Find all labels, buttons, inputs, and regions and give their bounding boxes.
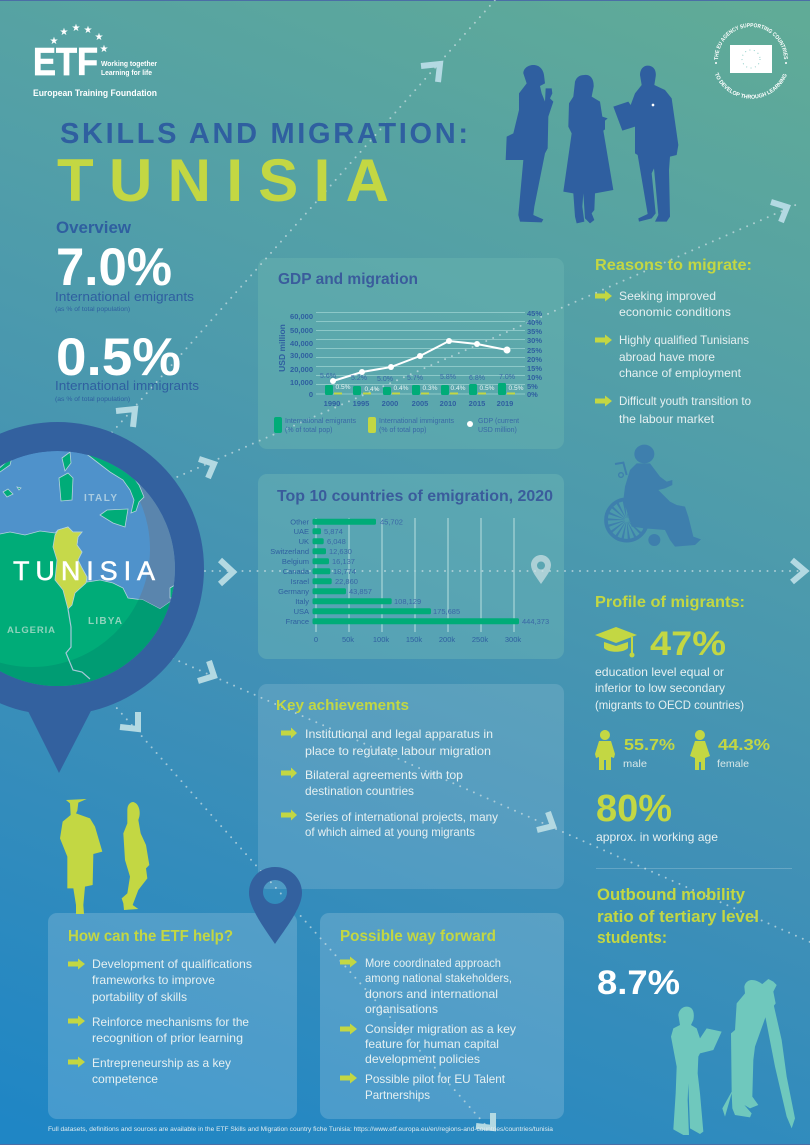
GDP and migration chart: 5.7%	[407, 375, 423, 382]
title: TUNISIA	[57, 147, 389, 214]
Top 10 countries chart: 200k	[439, 635, 455, 644]
Top 10 countries chart: Canada	[283, 567, 310, 576]
logo: ETF: ★	[50, 36, 59, 47]
stat: emigrants: International emigrants	[55, 289, 195, 304]
stat: male: male	[623, 758, 647, 770]
stat: immigrants	[55, 328, 200, 403]
Top 10 countries chart: Germany	[278, 587, 309, 596]
Top 10 countries chart: 12,630	[329, 547, 352, 556]
Top 10 countries chart: 45,702	[380, 518, 403, 526]
panel: way forward background	[320, 913, 564, 1119]
Top 10 countries chart: 444,373	[522, 617, 549, 626]
item 3: Possible pilot for EU Talent	[365, 1072, 506, 1086]
logo: ETF: ★	[72, 23, 81, 34]
reason 2: chance of employment	[619, 366, 742, 380]
Top 10 countries chart: Belgium	[282, 557, 309, 566]
footer source note: Full datasets, definitions and sources are available in the ETF Skills and Migration country fiche Tunisia: https://www.etf.europa.eu/en/regions-and-countries/countries/tunisia	[48, 1127, 554, 1133]
Top 10 countries chart: 43,857	[349, 587, 372, 596]
Top 10 countries chart: 300k	[505, 635, 521, 644]
achievement 2: destination countries	[305, 784, 414, 798]
location pin	[249, 867, 302, 944]
item 2: development policies	[365, 1052, 480, 1066]
GDP and migration chart: 5.8%	[440, 374, 456, 381]
bars	[312, 519, 519, 624]
Top 10 countries chart: Israel	[291, 577, 309, 586]
GDP and migration chart: 10%	[527, 373, 542, 382]
title: SKILLS AND MIGRATION:	[60, 118, 468, 150]
logo: ETF: ★	[84, 25, 93, 36]
Top 10 countries chart: 5,874	[324, 527, 343, 536]
chart legend	[274, 417, 519, 434]
Top 10 countries chart: 100k	[373, 635, 389, 644]
map labels	[7, 493, 155, 636]
reason 3: the labour market	[619, 412, 715, 426]
EU agency seal	[714, 23, 788, 99]
achievement 1	[281, 727, 493, 758]
stat: working age: 80%	[596, 788, 672, 830]
GDP and migration chart: 30%	[527, 336, 542, 345]
panel: GDP background	[258, 258, 564, 449]
item 3: Entrepreneurship as a key	[92, 1056, 231, 1070]
silhouette: three professionals	[506, 65, 678, 223]
icon: graduation cap	[595, 627, 637, 658]
achievement 3: of which aimed at young migrants	[305, 825, 475, 839]
silhouette: surveyors	[671, 979, 795, 1135]
GDP and migration chart: 0	[309, 390, 313, 399]
item 2	[340, 1022, 516, 1066]
GDP and migration chart: 2000	[382, 399, 398, 408]
heading: ratio of tertiary level	[597, 908, 759, 926]
Top 10 countries chart: 18,774	[333, 567, 356, 576]
item 2: feature for human capital	[365, 1037, 499, 1051]
stat: education: education level equal or	[595, 665, 724, 679]
item 1	[68, 957, 252, 1004]
how can the ETF help	[68, 928, 252, 1086]
Tunisia highlighted	[53, 527, 87, 609]
globe map pin	[0, 422, 204, 773]
GDP and migration chart: 6.8%	[469, 375, 485, 382]
panel: key achievements background	[258, 684, 564, 889]
panel: how can the ETF help background	[48, 913, 297, 1119]
achievement 2: Bilateral agreements with top	[305, 768, 463, 782]
reason 2: abroad have more	[619, 350, 715, 364]
logo: ETF: ★	[60, 27, 69, 38]
stat: immigrants: International immigrants	[55, 378, 200, 393]
heading: Outbound mobility	[597, 886, 746, 904]
item 1: Development of qualifications	[92, 957, 252, 971]
stat: education: inferior to low secondary	[595, 681, 725, 695]
GDP and migration chart: 0.5%	[479, 385, 495, 392]
heading: Key achievements	[276, 697, 409, 714]
logo: ETF: ★	[100, 44, 109, 55]
GDP and migration chart: 35%	[527, 327, 542, 336]
Top 10 countries chart: 16,137	[332, 557, 355, 566]
stat: emigrants: (as % of total population)	[55, 306, 130, 313]
GDP and migration chart: 0%	[527, 390, 538, 399]
GDP and migration chart: 7.0%	[499, 374, 515, 381]
stat: male	[595, 730, 675, 770]
Top 10 countries chart: 108,129	[394, 597, 421, 606]
item 1: portability of skills	[92, 990, 187, 1004]
item 3	[340, 1072, 506, 1102]
logo: ETF	[33, 23, 157, 99]
achievement 3: Series of international projects, many	[305, 810, 498, 824]
key achievements	[276, 697, 498, 839]
map pin on route	[531, 555, 551, 584]
logo: ETF: Learning for life	[101, 70, 152, 77]
silhouette: graduate and student	[60, 799, 149, 914]
Top 10 countries chart: Switzerland	[270, 547, 309, 556]
GDP and migration chart: 2010	[440, 399, 456, 408]
chart legend: (% of total pop)	[379, 427, 426, 434]
chart heading: GDP and migration	[278, 271, 418, 288]
reason 1: Seeking improved	[619, 289, 716, 303]
GDP and migration chart: 1995	[353, 399, 369, 408]
reason 2	[595, 333, 749, 380]
GDP and migration chart: 5.2%	[351, 375, 367, 382]
GDP and migration chart: 0.5%	[508, 385, 524, 392]
logo: ETF: ETF	[33, 41, 98, 84]
chart legend: International immigrants	[379, 418, 454, 425]
map labels: ALGERIA	[7, 625, 55, 636]
reason 2: Highly qualified Tunisians	[619, 333, 749, 347]
GDP and migration chart: 0.3%	[422, 385, 438, 392]
GDP and migration chart: 5.6%	[320, 373, 336, 380]
Top 10 countries chart: 175,685	[433, 607, 460, 616]
GDP and migration chart: 5.0%	[377, 376, 393, 383]
item 3: competence	[92, 1072, 158, 1086]
GDP and migration chart: 15%	[527, 364, 542, 373]
GDP and migration chart: USD million	[277, 324, 287, 372]
achievement 3	[281, 810, 498, 839]
logo: ETF: Working together	[101, 61, 157, 68]
GDP and migration chart: 1990	[324, 399, 340, 408]
Top 10 countries chart: 150k	[406, 635, 422, 644]
GDP and migration chart: 60,000	[290, 312, 313, 321]
heading: Reasons to migrate:	[595, 257, 752, 274]
Top 10 countries chart	[270, 488, 553, 644]
Top 10 countries chart: 50k	[342, 635, 354, 644]
GDP line	[330, 338, 510, 384]
item 1: frameworks to improve	[92, 973, 215, 987]
item 1: donors and international	[365, 987, 498, 1001]
chart legend: USD million)	[478, 427, 517, 434]
Top 10 countries chart: 22,860	[335, 577, 358, 586]
Top 10 countries chart: 0	[314, 635, 318, 644]
Top 10 countries chart: Other	[290, 518, 309, 526]
reason 3	[595, 394, 751, 426]
Top 10 countries chart: USA	[294, 607, 309, 616]
reason 3: Difficult youth transition to	[619, 394, 751, 408]
heading: How can the ETF help?	[68, 928, 233, 945]
GDP and migration chart: 0.4%	[364, 386, 380, 393]
stat: emigrants: 7.0%	[56, 238, 172, 297]
stat: 8.7%	[597, 964, 680, 1002]
GDP and migration chart: 40%	[527, 318, 542, 327]
map labels: LIBYA	[88, 616, 122, 627]
stat: female	[690, 730, 770, 770]
emigrant bars	[325, 383, 506, 395]
stat: male: 55.7%	[624, 737, 675, 754]
item 2: Reinforce mechanisms for the	[92, 1015, 249, 1029]
GDP and migration chart: 0.4%	[450, 385, 466, 392]
item 1: More coordinated approach	[365, 956, 501, 970]
GDP and migration chart: 2005	[412, 399, 428, 408]
chart legend: International emigrants	[285, 418, 356, 425]
logo: ETF: European Training Foundation	[33, 88, 157, 99]
stat: immigrants: (as % of total population)	[55, 396, 130, 403]
chevrons along routes	[116, 64, 805, 1128]
reason 1	[595, 289, 731, 319]
chart legend: (% of total pop)	[285, 427, 332, 434]
stat: working age: approx. in working age	[596, 830, 718, 844]
reasons to migrate	[595, 257, 752, 426]
pin body	[0, 422, 204, 773]
stat: education	[595, 625, 744, 712]
GDP and migration chart: 45%	[527, 309, 542, 318]
GDP and migration chart: 0.5%	[335, 384, 351, 391]
Top 10 countries chart: UAE	[294, 527, 309, 536]
GDP and migration chart: 25%	[527, 346, 542, 355]
achievement 1: place to regulate labour migration	[305, 744, 491, 758]
chart legend: GDP (current	[478, 418, 519, 425]
EU agency seal: TO DEVELOP THROUGH LEARNING	[715, 72, 786, 99]
GDP and migration chart: 0.4%	[393, 385, 409, 392]
item 2: Consider migration as a key	[365, 1022, 516, 1036]
Top 10 countries chart: France	[286, 617, 309, 626]
stat: female: female	[717, 758, 749, 770]
chart heading: Top 10 countries of emigration, 2020	[277, 488, 553, 505]
Top 10 countries chart: 250k	[472, 635, 488, 644]
GDP and migration chart	[274, 271, 542, 434]
item 1: among national stakeholders,	[365, 971, 512, 985]
outbound mobility	[597, 886, 759, 1002]
GDP and migration chart: 20%	[527, 355, 542, 364]
GDP and migration chart: 50,000	[290, 326, 313, 335]
profile of migrants	[595, 594, 770, 844]
EU agency seal: THE EU AGENCY SUPPORTING COUNTRIES	[714, 23, 788, 60]
GDP and migration chart: 20,000	[290, 365, 313, 374]
overview heading: Overview	[56, 219, 131, 237]
heading	[597, 886, 759, 947]
item 2: recognition of prior learning	[92, 1031, 243, 1045]
item 3: Partnerships	[365, 1088, 430, 1102]
map	[0, 451, 175, 686]
GDP and migration chart: 5%	[527, 382, 538, 391]
possible way forward	[340, 928, 516, 1102]
stat: education: 47%	[650, 625, 726, 663]
heading: Profile of migrants:	[595, 594, 745, 611]
Top 10 countries chart: 6,048	[327, 537, 346, 546]
stat: immigrants: 0.5%	[56, 328, 181, 387]
achievement 2	[281, 768, 463, 798]
achievement 1: Institutional and legal apparatus in	[305, 727, 493, 741]
item 1: organisations	[365, 1002, 438, 1016]
item 3	[68, 1056, 231, 1086]
overview	[55, 219, 200, 403]
logo: ETF: ★	[95, 32, 104, 43]
reason 1: economic conditions	[619, 305, 731, 319]
heading: students:	[597, 929, 667, 947]
GDP and migration chart: 2015	[469, 399, 485, 408]
GDP and migration chart: 10,000	[290, 378, 313, 387]
stat: emigrants	[55, 238, 195, 313]
stat: female: 44.3%	[718, 737, 770, 754]
stat: working age	[596, 788, 718, 844]
item 1	[340, 956, 512, 1016]
panel: top 10 background	[258, 474, 564, 659]
title	[57, 118, 468, 214]
immigrant bars	[334, 392, 515, 394]
heading: Possible way forward	[340, 928, 496, 945]
GDP and migration chart: 40,000	[290, 339, 313, 348]
map labels: ITALY	[84, 493, 117, 504]
map labels: TUNISIA	[13, 556, 155, 586]
GDP and migration chart: 2019	[497, 399, 513, 408]
stat: education: (migrants to OECD countries)	[595, 698, 744, 712]
silhouette: wheelchair user	[606, 445, 701, 547]
Top 10 countries chart: Italy	[295, 597, 309, 606]
Top 10 countries chart: UK	[299, 537, 309, 546]
GDP and migration chart: 30,000	[290, 351, 313, 360]
item 2	[68, 1015, 249, 1045]
